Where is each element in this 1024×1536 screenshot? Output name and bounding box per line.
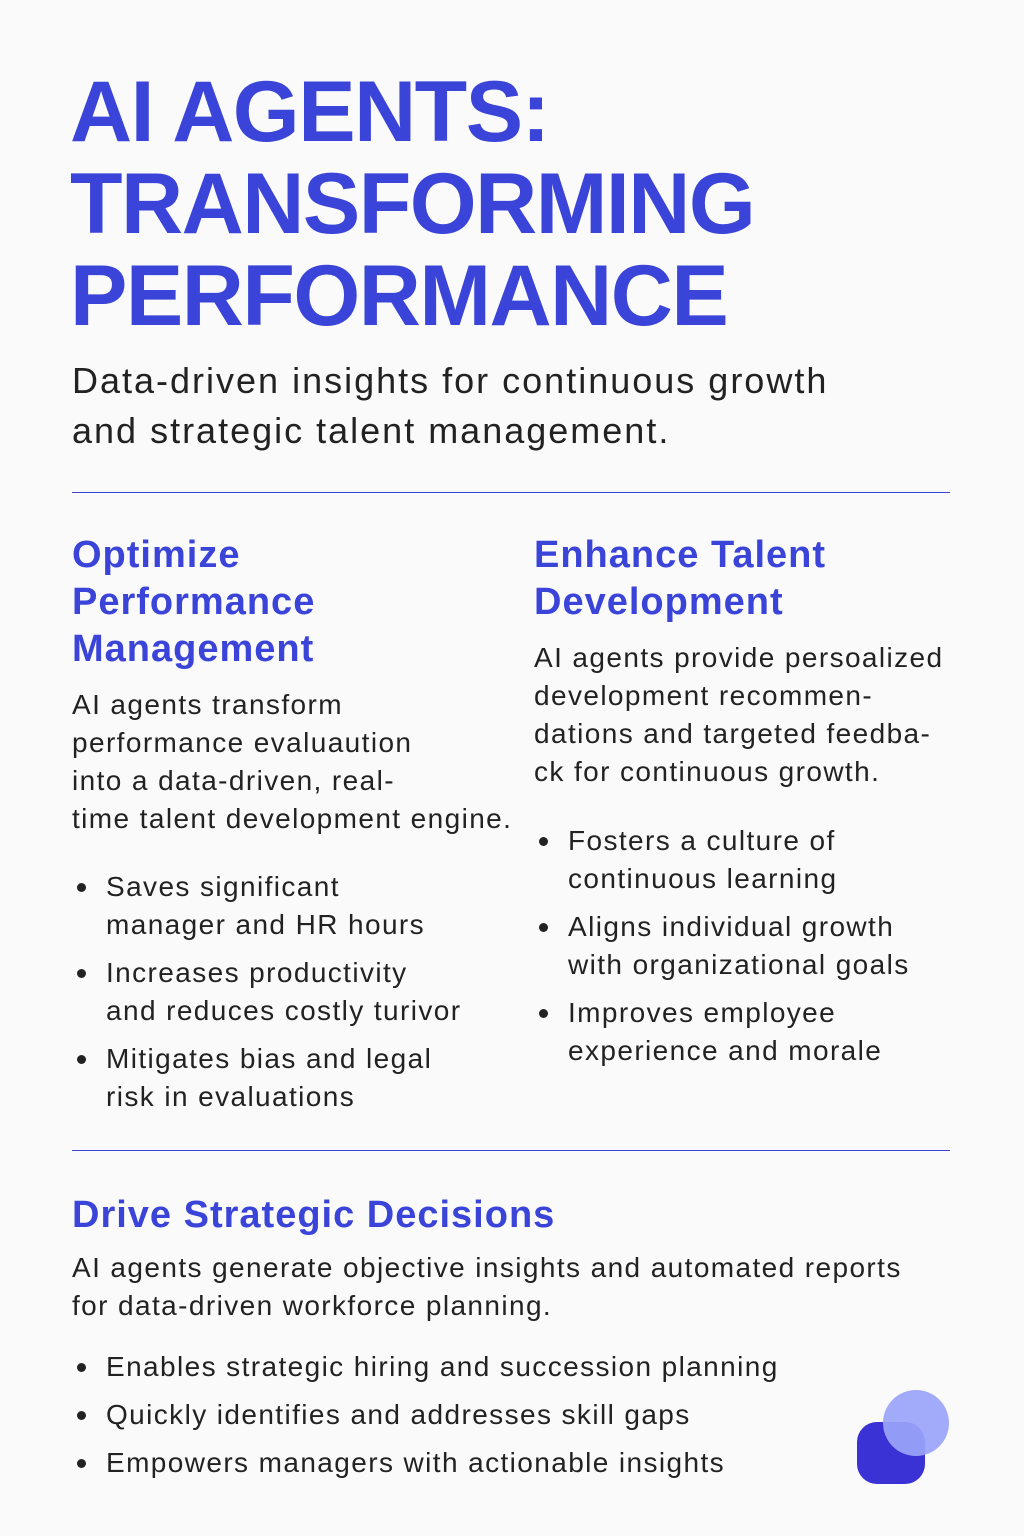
heading: optimize: Optimize bbox=[72, 534, 240, 576]
heading: optimize bbox=[72, 534, 315, 670]
text: optimize body: into a data-driven, real- bbox=[72, 765, 395, 796]
list: optimize bullets: Mitigates bias and legal bbox=[106, 1043, 432, 1074]
list: drive bullets: Empowers managers with actionable insights bbox=[106, 1447, 725, 1478]
heading: drive: Drive Strategic Decisions bbox=[72, 1194, 555, 1236]
text: drive body: AI agents generate objective insights and automated reports bbox=[72, 1252, 902, 1283]
list: optimize bullets bbox=[77, 871, 461, 1112]
text: drive body bbox=[72, 1252, 902, 1321]
list: enhance bullets: continuous learning bbox=[568, 863, 837, 894]
heading: enhance: Enhance Talent bbox=[534, 534, 826, 576]
text: enhance body bbox=[534, 642, 944, 787]
heading: enhance: Development bbox=[534, 581, 784, 623]
text: enhance body: dations and targeted feedba- bbox=[534, 718, 931, 749]
text: optimize body: AI agents transform bbox=[72, 689, 343, 720]
text: enhance body: development recommen- bbox=[534, 680, 873, 711]
heading: optimize: Performance bbox=[72, 581, 315, 623]
text: drive body: for data-driven workforce planning. bbox=[72, 1290, 552, 1321]
list: optimize bullets: risk in evaluations bbox=[106, 1081, 355, 1112]
list: optimize bullets: Saves significant bbox=[106, 871, 340, 902]
title: AI AGENTS: bbox=[70, 64, 549, 160]
title: TRANSFORMING bbox=[70, 156, 754, 252]
list: drive bullets: Enables strategic hiring and succession planning bbox=[106, 1351, 779, 1382]
subtitle bbox=[72, 360, 828, 451]
title bbox=[70, 64, 754, 344]
list: enhance bullets bbox=[539, 825, 910, 1066]
list: drive bullets bbox=[77, 1351, 779, 1478]
heading: enhance bbox=[534, 534, 826, 623]
panel: optimize performance management bbox=[72, 534, 512, 1112]
list: optimize bullets: Increases productivity bbox=[106, 957, 408, 988]
subtitle: Data-driven insights for continuous growth bbox=[72, 360, 828, 401]
list: enhance bullets: Improves employee bbox=[568, 997, 836, 1028]
list: enhance bullets: experience and morale bbox=[568, 1035, 882, 1066]
panel: enhance talent development bbox=[534, 534, 944, 1066]
text: optimize body bbox=[72, 689, 512, 834]
icon: logo bbox=[857, 1390, 949, 1484]
list: enhance bullets: with organizational goals bbox=[568, 949, 910, 980]
text: optimize body: performance evaluaution bbox=[72, 727, 412, 758]
list: enhance bullets: Fosters a culture of bbox=[568, 825, 836, 856]
list: enhance bullets: Aligns individual growth bbox=[568, 911, 894, 942]
list: drive bullets: Quickly identifies and addresses skill gaps bbox=[106, 1399, 691, 1430]
panel: drive strategic decisions bbox=[72, 1194, 902, 1478]
title: PERFORMANCE bbox=[70, 248, 727, 344]
list: optimize bullets: manager and HR hours bbox=[106, 909, 425, 940]
subtitle: and strategic talent management. bbox=[72, 410, 670, 451]
text: enhance body: AI agents provide persoalized bbox=[534, 642, 944, 673]
text: optimize body: time talent development engine. bbox=[72, 803, 512, 834]
heading: optimize: Management bbox=[72, 628, 314, 670]
text: enhance body: ck for continuous growth. bbox=[534, 756, 880, 787]
list: optimize bullets: and reduces costly turivor bbox=[106, 995, 461, 1026]
